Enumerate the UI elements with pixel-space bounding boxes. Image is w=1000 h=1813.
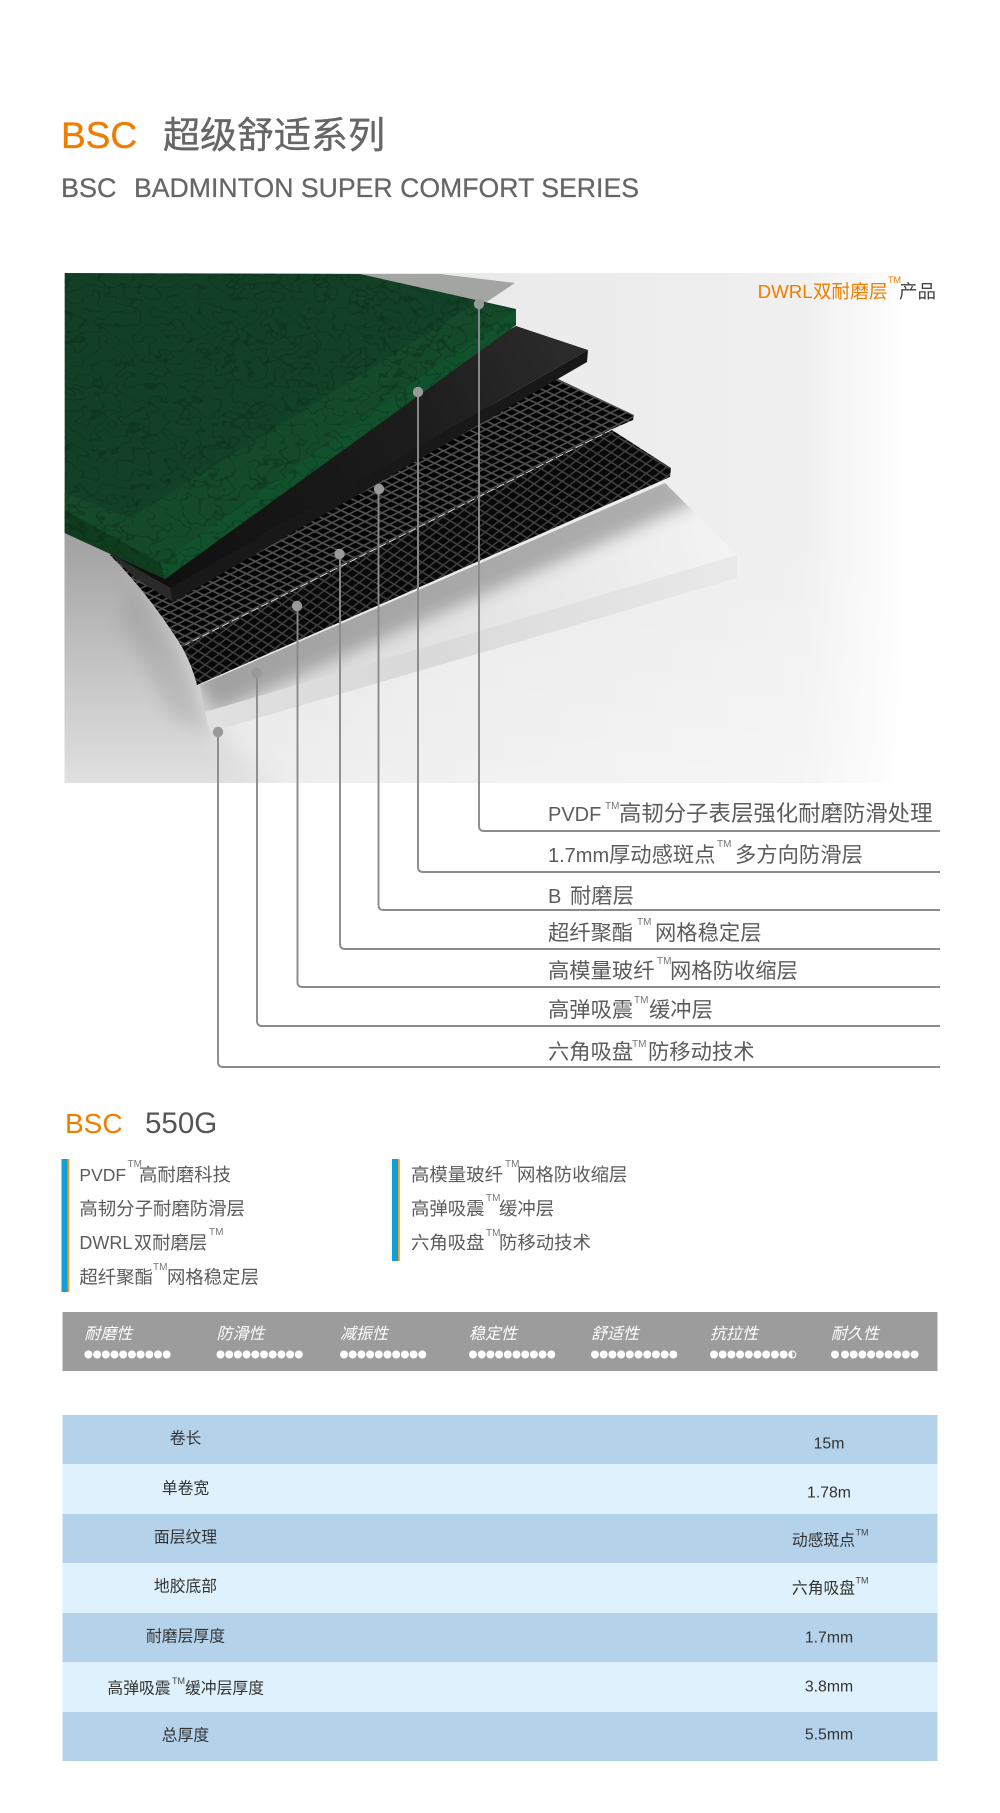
feature 7: 六角吸盘 bbox=[411, 1232, 485, 1253]
label 7 bbox=[548, 1039, 754, 1064]
row: backing: 地胶底部 bbox=[154, 1578, 217, 1596]
label 4: 网格稳定层 bbox=[655, 921, 762, 945]
title: 超级舒适系列 bbox=[163, 115, 385, 156]
white cushion layer bbox=[200, 483, 698, 732]
feature 1 bbox=[79, 1159, 231, 1185]
model heading bbox=[65, 1107, 217, 1140]
row: roll length: 卷长 bbox=[170, 1430, 201, 1448]
row: total thickness bbox=[62, 1712, 938, 1761]
feature 6: 高弹吸震 bbox=[411, 1198, 485, 1219]
feature 4: 网格稳定层 bbox=[167, 1266, 259, 1288]
row: surface texture: TM bbox=[856, 1528, 868, 1538]
leader 7 bbox=[218, 732, 940, 1067]
leader 2 bbox=[418, 392, 940, 872]
label 6: 缓冲层 bbox=[649, 998, 713, 1022]
feature 3: 双耐磨层 bbox=[134, 1232, 207, 1253]
row: wear layer thickness: 1.7mm bbox=[805, 1630, 853, 1646]
rating: shock absorption: 减振性 bbox=[340, 1325, 390, 1343]
label 1: TM bbox=[605, 801, 619, 812]
label 6 bbox=[548, 995, 713, 1022]
leader 4 bbox=[340, 554, 940, 949]
rating: wear resistance bbox=[84, 1325, 171, 1358]
feature 7 bbox=[411, 1228, 591, 1253]
feature 4: TM bbox=[153, 1262, 167, 1273]
rating: tensile strength: 抗拉性 bbox=[710, 1325, 760, 1343]
row: total thickness: 5.5mm bbox=[805, 1726, 853, 1744]
label 7: 六角吸盘 bbox=[548, 1040, 633, 1064]
row: roll length bbox=[62, 1415, 938, 1464]
rating: comfort bbox=[591, 1325, 677, 1358]
rating: shock absorption bbox=[340, 1325, 426, 1358]
accent bar right bbox=[392, 1159, 400, 1261]
feature 3: TM bbox=[209, 1227, 223, 1238]
leader 6 bbox=[257, 673, 940, 1026]
product layer illustration bbox=[64, 273, 852, 783]
row: roll width: 1.78m bbox=[807, 1484, 851, 1502]
badge: DWRL product bbox=[758, 275, 936, 302]
performance rating bar bbox=[62, 1312, 938, 1371]
subtitle: BADMINTON SUPER COMFORT SERIES bbox=[134, 173, 639, 203]
label 5 bbox=[548, 956, 798, 983]
label 4 bbox=[548, 917, 762, 945]
rating: wear resistance: 耐磨性 bbox=[84, 1325, 134, 1343]
rating: durability: 耐久性 bbox=[831, 1325, 881, 1343]
label 2 bbox=[548, 839, 863, 867]
feature 1: TM bbox=[128, 1159, 142, 1170]
feature 3: DWRL bbox=[79, 1233, 132, 1253]
label 5: TM bbox=[657, 956, 671, 967]
row: cushion thickness: 高弹吸震 bbox=[107, 1680, 171, 1698]
badge: DWRL product: DWRL双耐磨层 bbox=[758, 281, 888, 302]
leader 5 bbox=[298, 606, 940, 987]
green surface layer bbox=[64, 273, 524, 583]
rating: comfort: 舒适性 bbox=[591, 1325, 641, 1343]
feature 5: 高模量玻纤 bbox=[411, 1164, 503, 1185]
row: backing: TM bbox=[856, 1576, 868, 1586]
rating: stability bbox=[469, 1325, 555, 1358]
feature 5 bbox=[411, 1159, 627, 1185]
leader 3 bbox=[378, 489, 940, 910]
feature 2: 高韧分子耐磨防滑层 bbox=[79, 1198, 245, 1219]
row: surface texture: 面层纹理 bbox=[154, 1528, 217, 1546]
model heading: BSC bbox=[65, 1108, 123, 1139]
label 5: 高模量玻纤 bbox=[548, 959, 654, 983]
subtitle: BSC bbox=[61, 173, 117, 203]
feature 5: 网格防收缩层 bbox=[517, 1164, 627, 1185]
accent bar left bbox=[62, 1159, 69, 1292]
row: surface texture bbox=[62, 1514, 938, 1563]
row: cushion thickness: 3.8mm bbox=[805, 1678, 853, 1696]
label 2: TM bbox=[717, 839, 731, 850]
label 2: 1.7mm bbox=[548, 845, 609, 867]
label 7: TM bbox=[632, 1039, 646, 1050]
title bbox=[61, 115, 385, 156]
badge: DWRL product: 产品 bbox=[899, 281, 936, 302]
row: wear layer thickness bbox=[62, 1613, 938, 1662]
row: roll width bbox=[62, 1464, 938, 1514]
feature 6: TM bbox=[486, 1193, 500, 1204]
row: roll length: 15m bbox=[814, 1436, 844, 1452]
title: BSC bbox=[61, 115, 137, 156]
feature 4 bbox=[79, 1262, 259, 1288]
label 4: 超纤聚酯 bbox=[548, 921, 633, 945]
feature 1: PVDF bbox=[79, 1165, 126, 1185]
row: surface texture: 动感斑点 bbox=[792, 1532, 855, 1550]
callout leader lines bbox=[218, 304, 940, 1067]
leader 1 bbox=[479, 304, 940, 831]
lower mesh shock layer bbox=[182, 430, 671, 685]
label 6: TM bbox=[634, 995, 648, 1006]
row: total thickness: 总厚度 bbox=[162, 1726, 209, 1744]
rating: durability bbox=[831, 1325, 919, 1358]
feature 5: TM bbox=[505, 1159, 519, 1170]
feature 6: 缓冲层 bbox=[499, 1198, 554, 1219]
row: backing: 六角吸盘 bbox=[792, 1578, 855, 1598]
label 6: 高弹吸震 bbox=[548, 998, 633, 1022]
row: backing bbox=[62, 1563, 938, 1613]
label 3: 耐磨层 bbox=[570, 884, 634, 908]
label 3: B bbox=[548, 886, 561, 908]
label 1: PVDF bbox=[548, 804, 601, 826]
feature 4: 超纤聚酯 bbox=[79, 1266, 153, 1288]
model heading: 550G bbox=[145, 1107, 217, 1140]
callout pins bbox=[213, 299, 484, 737]
label 2: 厚动感斑点 bbox=[609, 843, 716, 867]
specification table bbox=[62, 1415, 938, 1761]
badge: DWRL product: TM bbox=[888, 275, 901, 285]
layer labels bbox=[548, 801, 932, 1064]
rating: stability: 稳定性 bbox=[469, 1325, 519, 1343]
label 2: 多方向防滑层 bbox=[735, 843, 863, 867]
feature 3 bbox=[79, 1227, 223, 1253]
feature list left bbox=[62, 1159, 259, 1292]
row: cushion thickness: 缓冲层厚度 bbox=[185, 1680, 264, 1698]
rating: slip resistance bbox=[216, 1325, 303, 1358]
label 4: TM bbox=[637, 917, 651, 928]
row: roll width: 单卷宽 bbox=[162, 1480, 209, 1498]
feature 7: TM bbox=[486, 1228, 500, 1239]
rating: tensile strength bbox=[710, 1325, 796, 1358]
feature 7: 防移动技术 bbox=[499, 1232, 591, 1253]
feature list right bbox=[392, 1159, 627, 1261]
upper fibre mesh layer bbox=[110, 379, 634, 647]
label 7: 防移动技术 bbox=[648, 1040, 754, 1064]
row: cushion thickness bbox=[62, 1662, 938, 1712]
row: wear layer thickness: 耐磨层厚度 bbox=[146, 1628, 225, 1646]
label 1: 高韧分子表层强化耐磨防滑处理 bbox=[619, 801, 932, 826]
row: cushion thickness: TM bbox=[172, 1676, 185, 1686]
rating: slip resistance: 防滑性 bbox=[216, 1325, 267, 1343]
label 5: 网格防收缩层 bbox=[670, 959, 798, 983]
black wear layer bbox=[108, 326, 588, 602]
feature 1: 高耐磨科技 bbox=[139, 1164, 231, 1185]
feature 6 bbox=[411, 1193, 554, 1219]
